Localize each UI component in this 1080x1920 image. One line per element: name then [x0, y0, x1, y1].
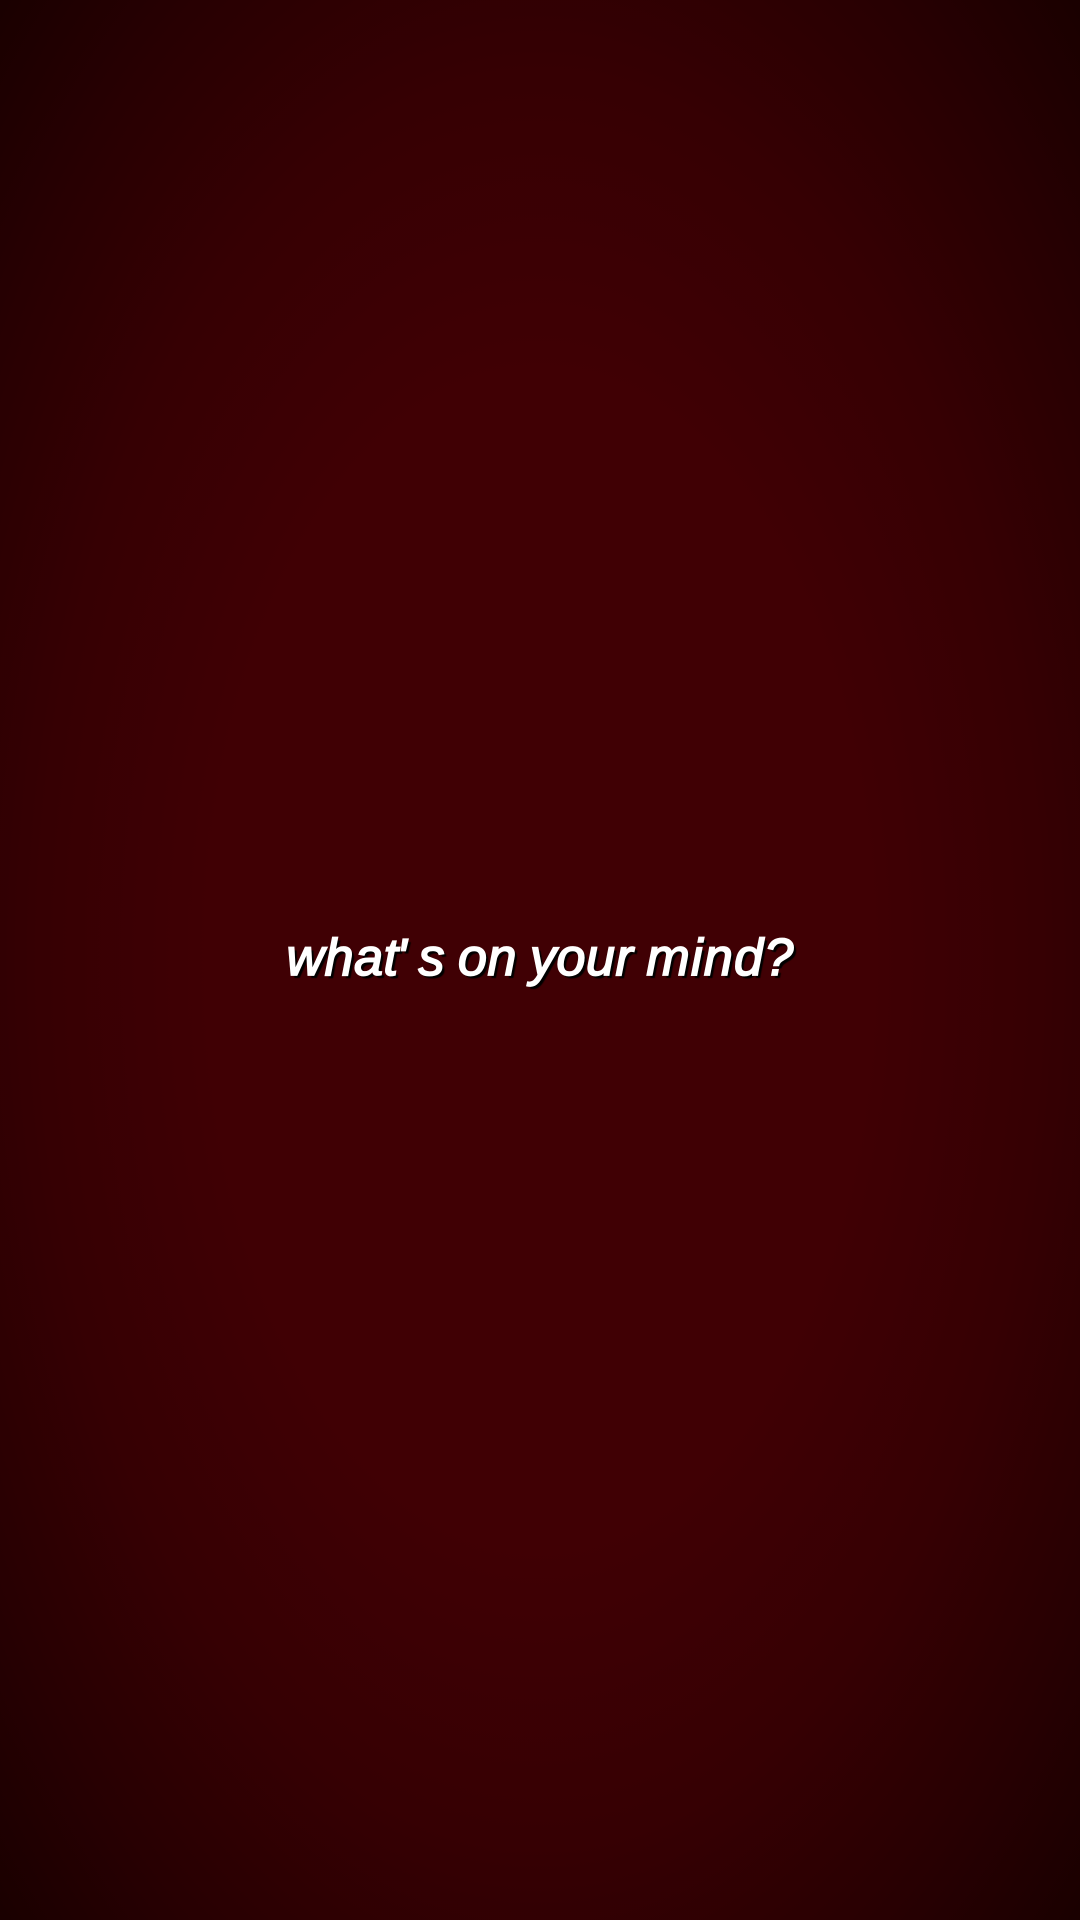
title: what's on your mind? [286, 929, 795, 987]
